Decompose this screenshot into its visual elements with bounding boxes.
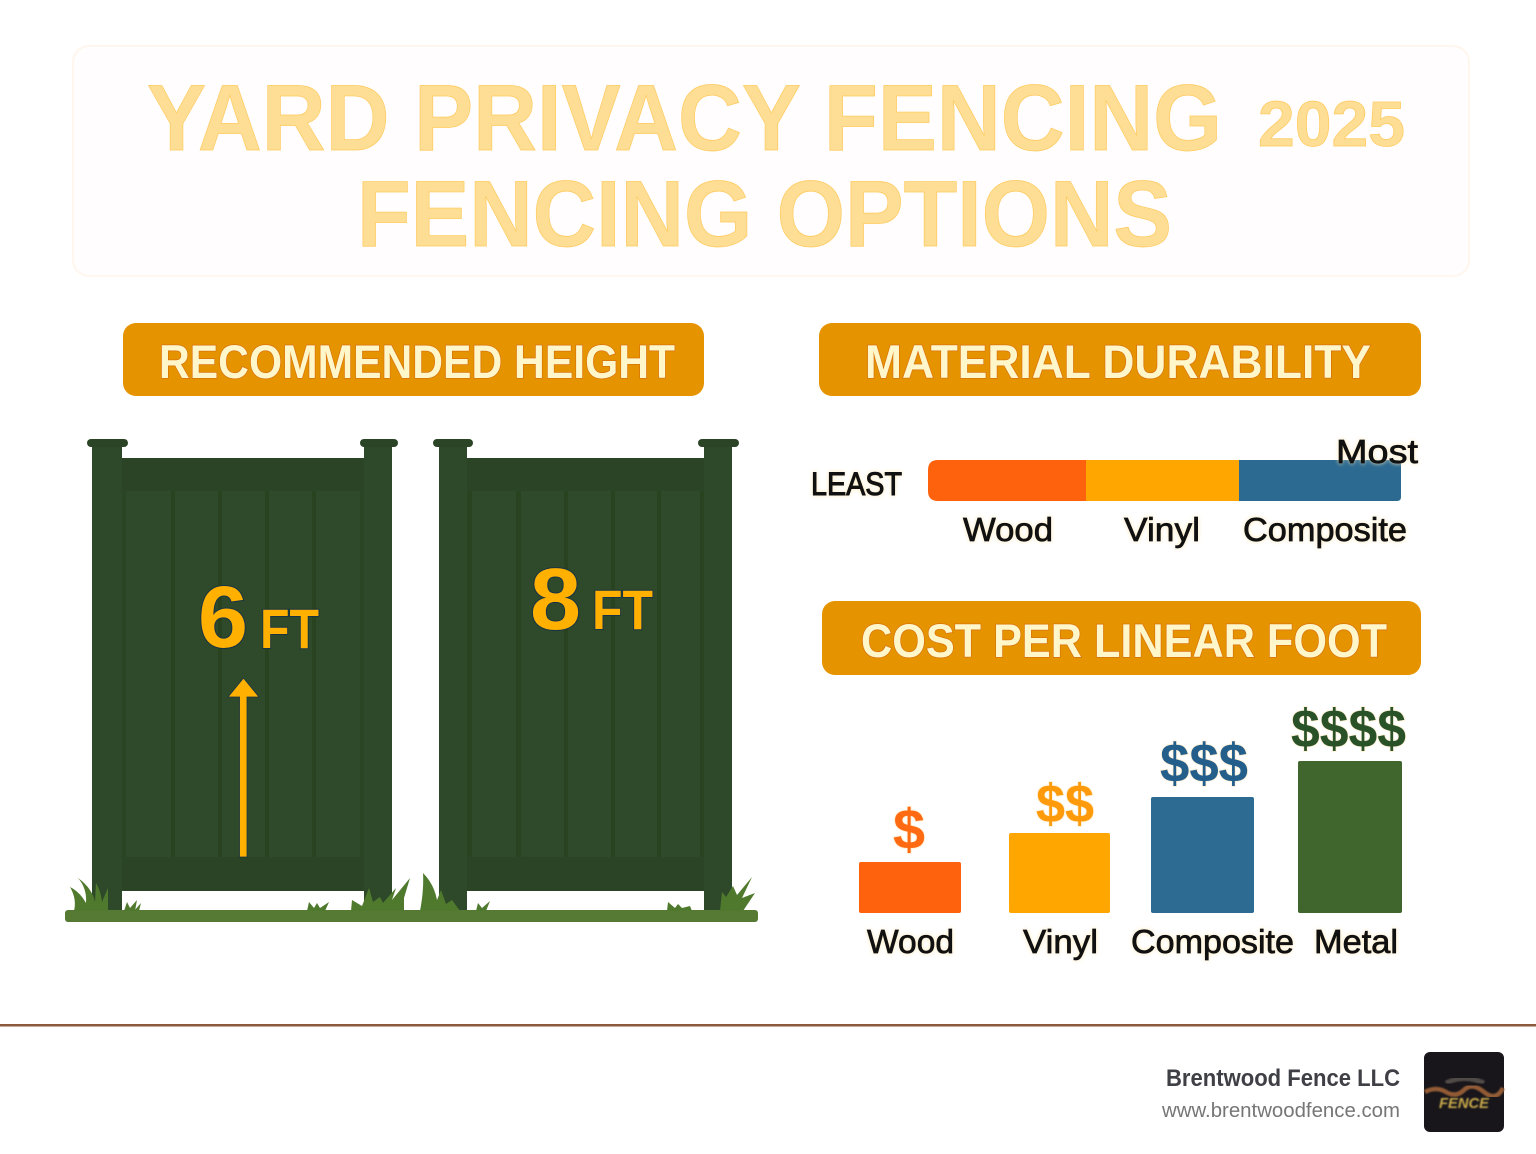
footer divider [0, 1024, 1536, 1026]
durability labels: Wood [963, 511, 1053, 548]
title: 2025 [1258, 88, 1405, 160]
heading: material durability: MATERIAL DURABILITY [865, 335, 1371, 388]
heading: material durability [819, 323, 1421, 396]
title: YARD PRIVACY FENCING [147, 65, 1222, 170]
bar: vinyl [1009, 774, 1110, 960]
bar: metal: Metal [1314, 923, 1398, 960]
cost bar chart [859, 699, 1406, 960]
ground strip [65, 910, 758, 922]
arrow: height [228, 678, 259, 857]
heading: cost per linear foot [822, 601, 1421, 675]
logo [1424, 1052, 1504, 1132]
label: 6 ft [198, 569, 319, 666]
durability bar [928, 460, 1401, 501]
label: 8 ft: FT [592, 578, 653, 641]
bar: composite: Composite [1131, 923, 1294, 960]
durability labels: Vinyl [1124, 511, 1200, 548]
label: 6 ft: 6 [198, 569, 248, 666]
bar: metal [1291, 699, 1406, 960]
bar: wood: Wood [867, 923, 954, 960]
heading: recommended height: RECOMMENDED HEIGHT [159, 335, 675, 388]
bar: vinyl: $$ [1036, 774, 1094, 834]
label: least: LEAST [811, 466, 902, 502]
bar: wood: $ [893, 798, 925, 862]
6 ft fence [87, 439, 398, 910]
label: 8 ft: 8 [530, 551, 581, 648]
label: 6 ft: FT [260, 597, 319, 660]
title panel [73, 46, 1469, 276]
grass tufts [70, 873, 755, 911]
heading: cost per linear foot: COST PER LINEAR FOOT [861, 614, 1387, 667]
bar: metal: $$$$ [1291, 699, 1406, 759]
8 ft fence [433, 439, 739, 910]
durability labels: Composite [1243, 511, 1407, 548]
label: 8 ft [530, 551, 653, 648]
bar: composite: $$$ [1160, 732, 1248, 794]
title [147, 65, 1405, 266]
bar: wood [859, 798, 961, 960]
heading: recommended height [123, 323, 704, 396]
title: FENCING OPTIONS [357, 161, 1172, 266]
footer brand text: Brentwood Fence LLC [1166, 1065, 1400, 1092]
footer brand text: www.brentwoodfence.com [1161, 1100, 1400, 1122]
footer brand text [1161, 1065, 1400, 1122]
bar: vinyl: Vinyl [1023, 923, 1098, 960]
logo: FENCE [1439, 1095, 1490, 1112]
label: most: Most [1336, 433, 1418, 470]
durability labels [963, 511, 1407, 548]
bar: composite [1131, 732, 1294, 960]
